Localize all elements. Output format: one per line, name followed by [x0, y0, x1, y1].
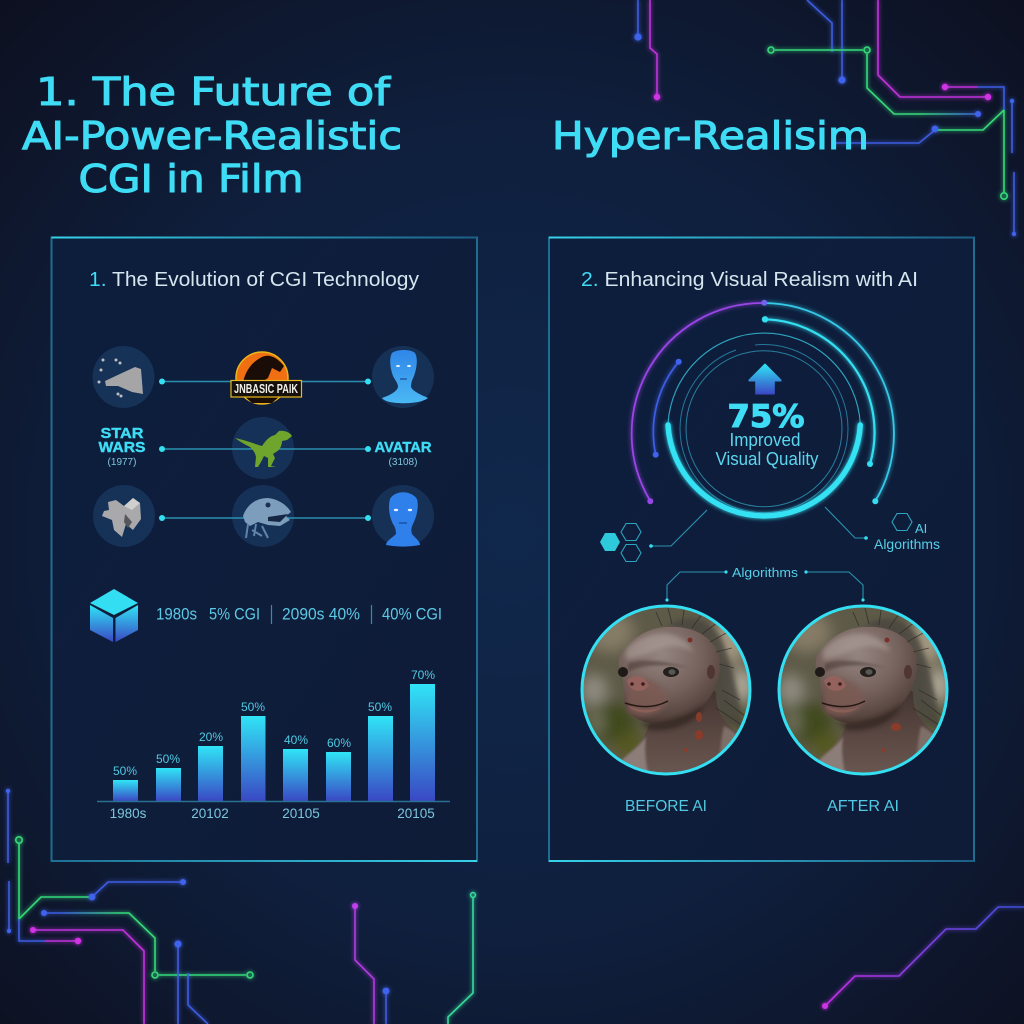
icon: Jurassic Park logo — [231, 352, 302, 404]
axis labels — [110, 806, 435, 821]
bar value labels: 50% — [368, 700, 392, 714]
stats row — [156, 605, 442, 624]
axis labels: 1980s — [110, 806, 147, 821]
title: right: Hyper-Realisim — [552, 114, 869, 158]
algorithms bracket — [665, 565, 865, 602]
label: Star Wars: (1977) — [108, 457, 136, 468]
image: creature after AI — [777, 604, 951, 782]
title: left: 1. The Future of — [36, 70, 392, 114]
panel heading: realism: 2. Enhancing Visual Realism with AI — [581, 268, 918, 291]
panel: enhancing visual realism — [549, 238, 974, 861]
title: left — [22, 70, 402, 201]
bar value labels: 70% — [411, 668, 435, 682]
label: Avatar — [374, 439, 432, 468]
algorithms bracket: Algorithms — [732, 565, 799, 580]
label: Star Wars — [98, 425, 146, 468]
icon: CGI cube — [90, 589, 138, 642]
gauge value: Visual Quality — [716, 449, 818, 469]
bar value labels: 50% — [156, 752, 180, 766]
bar value labels — [113, 668, 435, 778]
image: creature before AI — [580, 604, 754, 782]
AI algorithms callout: AI — [915, 521, 927, 536]
circuit lines: bottom centre and right — [352, 893, 1024, 1024]
panel heading: evolution: 1. The Evolution of CGI Technology — [89, 268, 420, 291]
hexagon cluster with connector — [600, 510, 707, 562]
axis labels: 20105 — [397, 806, 435, 821]
title: left: AI-Power-Realistic — [22, 114, 402, 158]
stats row: 1980s — [156, 606, 197, 624]
AI algorithms callout: Algorithms — [874, 537, 940, 552]
bars — [113, 684, 435, 801]
icon: avatar face, bottom — [386, 492, 420, 546]
gauge value: Improved — [730, 430, 800, 450]
label: Star Wars: WARS — [98, 439, 146, 456]
gauge value — [716, 399, 818, 469]
radial gauge — [632, 300, 894, 516]
axis labels: 20105 — [282, 806, 320, 821]
stats row: 2090s 40% — [282, 606, 360, 624]
icon: avatar face, top — [382, 350, 428, 403]
icon: Jurassic Park logo: JNBASIC PAIK — [234, 382, 298, 396]
circuit lines: bottom left — [6, 789, 253, 1024]
bar chart — [97, 668, 450, 821]
caption: before AI: BEFORE AI — [625, 798, 707, 815]
bar value labels: 40% — [284, 733, 308, 747]
AI algorithms callout — [825, 507, 940, 552]
bar value labels: 50% — [113, 764, 137, 778]
stats row: 5% CGI — [209, 606, 260, 624]
icon: up arrow — [749, 364, 781, 394]
icon: particle debris — [98, 358, 143, 398]
icon: green T-rex — [235, 431, 292, 467]
icon: grey voxel shape — [102, 498, 141, 537]
bar value labels: 20% — [199, 730, 223, 744]
bar value labels: 60% — [327, 736, 351, 750]
circuit lines: top right — [634, 0, 1016, 236]
axis labels: 20102 — [191, 806, 229, 821]
label: Avatar: AVATAR — [374, 439, 432, 456]
timeline connectors — [92, 346, 434, 547]
caption: after AI: AFTER AI — [827, 798, 899, 815]
gauge value: 75% — [728, 399, 804, 435]
title: left: CGI in Film — [78, 157, 304, 201]
axis line — [97, 800, 450, 802]
bar value labels: 50% — [241, 700, 265, 714]
icon: dinosaur skeleton — [243, 498, 291, 538]
label: Star Wars: STAR — [100, 425, 144, 442]
panel: evolution of CGI — [52, 238, 477, 861]
stats row: 40% CGI — [382, 606, 442, 624]
label: Avatar: (3108) — [389, 457, 417, 468]
